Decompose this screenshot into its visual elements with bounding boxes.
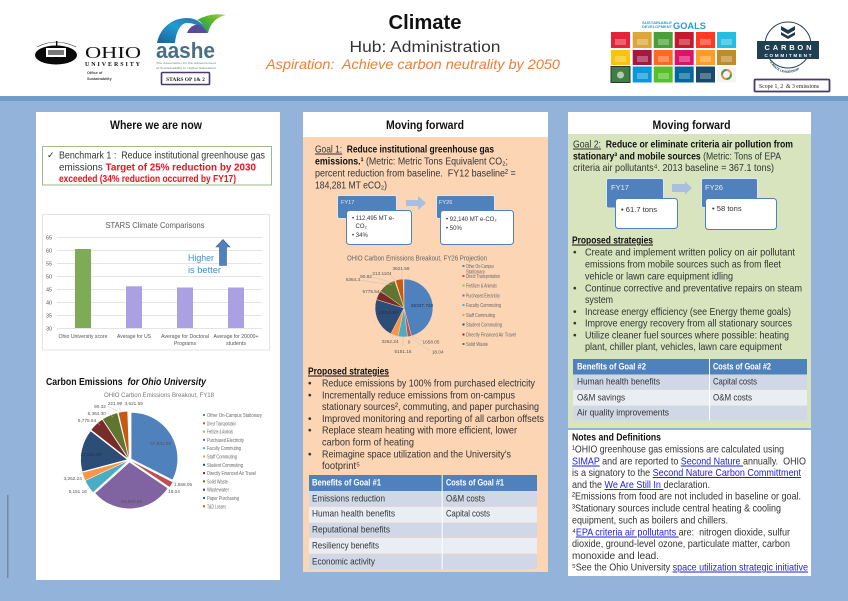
pie chart: FY26 projection: 12016.90: [378, 310, 398, 315]
proposed strategies goal 1: footprint⁵: [322, 461, 360, 472]
flow: FY17 to FY26 emissions: [338, 196, 514, 244]
benchmark callout: exceeded (34% reduction occurred by FY17): [59, 174, 236, 185]
pie chart: FY26 projection: 213.1104: [372, 271, 392, 276]
logo: AASHE: aashe: [156, 38, 215, 63]
pie chart: FY26 projection: 5775.54: [363, 289, 380, 294]
table: benefits and costs of goal 1: Benefits of Goal #1: [312, 478, 381, 488]
pie chart: FY18 emissions: OHIO Carbon Emissions Breakout, FY18: [104, 392, 214, 399]
proposed strategies goal 2: •: [573, 284, 577, 294]
table: benefits and costs of goal 2: Air quality improvements: [577, 408, 669, 418]
table: benefits and costs of goal 2: [573, 359, 807, 420]
pie legend: Direct Transportation: [207, 421, 236, 427]
flow: FY17 to FY26 emissions: FY17: [341, 200, 354, 206]
benchmark callout: ✓: [47, 150, 55, 160]
proposed strategies goal 1: Proposed strategies: [308, 366, 389, 378]
proposed strategies goal 2: plant, chiller plant, vehicles, lawn care equipment: [585, 342, 782, 353]
pie chart: FY18 emissions: 1,658.05: [174, 482, 193, 487]
table: benefits and costs of goal 2: Capital costs: [713, 376, 757, 386]
table: benefits and costs of goal 1: O&M costs: [446, 494, 485, 504]
heading: moving forward: Moving forward: [386, 120, 464, 132]
proposed strategies goal 2: •: [573, 318, 577, 330]
pie chart: FY26 projection: 1658.05: [423, 340, 440, 344]
flow: FY17 to FY26 tons: [606, 178, 776, 230]
notes text: equipment, such as boilers and chillers.: [572, 516, 728, 526]
table: benefits and costs of goal 2: O&M costs: [713, 392, 752, 402]
proposed strategies goal 1: •: [308, 390, 312, 402]
goal 1 statement: Goal 1: Reduce institutional greenhouse gas: [315, 144, 494, 156]
proposed strategies goal 2: emissions from mobile sources such as from fleet: [585, 260, 781, 270]
title: Climate: [388, 12, 462, 34]
logo: AASHE: [156, 14, 226, 84]
proposed strategies goal 1: [308, 366, 544, 472]
flow: FY17 to FY26 tons: FY26: [705, 183, 723, 192]
pie chart: FY18 emissions: 3,621.59: [125, 401, 143, 406]
bar chart: STARS climate comparisons: 60: [46, 248, 52, 254]
logo: Ohio University: Sustainability: [87, 77, 113, 81]
proposed strategies goal 1: Reimagine space utilization and the University's: [322, 450, 511, 460]
bar chart: STARS climate comparisons: Average for US: [117, 334, 151, 340]
bar chart: STARS climate comparisons: Ohio University score: [58, 334, 108, 340]
proposed strategies goal 2: Continue corrective and preventative repairs on steam: [585, 284, 802, 294]
logo: Carbon Commitment: CARBON: [764, 43, 812, 52]
logo: Ohio University: Office of: [87, 71, 103, 75]
flow: FY17 to FY26 emissions: • 50%: [446, 226, 462, 232]
pie chart: FY26 projection: [346, 256, 516, 354]
pie chart: FY18 emissions: 3,262.24: [64, 476, 82, 481]
hub subtitle: Hub: Administration: [350, 39, 500, 56]
callout: higher is better: Higher: [188, 253, 214, 263]
proposed strategies goal 2: vehicle or lawn care equipment idling: [585, 272, 733, 282]
pie chart: FY26 projection: 3262.24: [382, 339, 399, 344]
pie chart: FY18 emissions: 6,364.30: [88, 411, 106, 416]
panel: notes and definitions: [568, 430, 811, 576]
title: [265, 12, 560, 72]
STARS callout box: STARS OP 1& 2: [166, 77, 205, 83]
pie legend: Solid Waste: [466, 342, 488, 348]
pie chart: FY26 projection: 26337.728: [411, 303, 433, 308]
benchmark callout: emissions Target of 25% reduction by 2030: [59, 162, 256, 174]
pie chart: FY18 emissions: [64, 392, 262, 510]
pie legend: [462, 264, 516, 348]
bar chart: STARS climate comparisons: 40: [46, 300, 52, 306]
proposed strategies goal 2: •: [573, 330, 577, 342]
table: benefits and costs of goal 2: Benefits of Goal #2: [577, 362, 646, 372]
proposed strategies goal 1: stationary sources², commuting, and paper purchasing: [322, 402, 539, 413]
pie legend: [203, 413, 262, 510]
notes text: ²Emissions from food are not included in baseline or goal.: [572, 492, 801, 502]
proposed strategies goal 2: Proposed strategies: [572, 236, 653, 246]
pie legend: Faculty Commuting: [207, 446, 241, 452]
pie legend: Purchased Electricity: [207, 438, 244, 444]
logo: Carbon Commitment: CLIMATE LEADERSHIP: [770, 60, 799, 73]
notes text: SIMAP and are reported to Second Nature annually. OHIO: [572, 456, 806, 468]
notes text: ⁴EPA criteria air pollutants are: nitrogen dioxide, sulfur: [572, 528, 791, 538]
arrow: higher is better: [216, 240, 230, 266]
pie legend: Staff Commuting: [207, 454, 237, 460]
pie legend: Directly Financed Air Travel: [466, 332, 516, 338]
vertical small print: [7, 495, 8, 578]
bar chart: STARS climate comparisons: Average for Doctoral: [161, 334, 209, 340]
notes text: and the We Are Still In declaration.: [572, 480, 710, 491]
proposed strategies goal 2: Improve energy recovery from all stationary sources: [585, 318, 792, 330]
flow: FY17 to FY26 emissions: • 92,140 MT e-CO₂: [446, 217, 497, 223]
logo: Sustainable Development Goals: GOALS: [673, 21, 706, 31]
heading: moving forward: Moving forward: [652, 120, 730, 132]
bar chart: STARS climate comparisons: 35: [46, 314, 52, 320]
pie legend: Stationary: [466, 270, 485, 276]
pie chart: FY26 projection: 5151.16: [395, 349, 412, 354]
logo: Ohio University: UNIVERSITY: [85, 62, 141, 68]
table: benefits and costs of goal 2: O&M savings: [577, 392, 625, 402]
pie chart: FY26 projection: 90.82: [360, 274, 372, 279]
flow: FY17 to FY26 emissions: • 112,495 MT e-: [352, 216, 394, 222]
bar chart: STARS climate comparisons: students: [226, 341, 246, 347]
pie legend: Student Commuting: [466, 322, 502, 328]
pie legend: Directly Financed Air Travel: [207, 471, 256, 477]
pie chart: FY18 emissions: 54,823.66: [121, 499, 143, 504]
proposed strategies goal 1: Reduce emissions by 100% from purchased electricity: [322, 378, 536, 390]
table: benefits and costs of goal 1: Capital costs: [446, 508, 490, 518]
proposed strategies goal 1: Replace steam heating with more efficient, lower: [322, 426, 518, 436]
logo: Sustainable Development Goals: SUSTAINABLE: [642, 21, 673, 25]
goal 2 statement: Goal 2: Reduce or eliminate criteria air pollution from: [573, 140, 793, 150]
proposed strategies goal 2: Create and implement written policy on air pollutant: [585, 248, 795, 258]
callout: higher is better: [188, 253, 221, 275]
bar chart: STARS climate comparisons: 50: [46, 274, 52, 280]
logo: Sustainable Development Goals: [611, 21, 736, 82]
proposed strategies goal 2: system: [585, 295, 613, 306]
panel: where we are now: [36, 112, 280, 580]
proposed strategies goal 1: Incrementally reduce emissions from on-campus: [322, 390, 515, 402]
pie legend: Wastewater: [207, 488, 229, 494]
arrow: FY17 to FY26: [406, 196, 426, 210]
notes text: ¹OHIO greenhouse gas emissions are calculated using: [572, 444, 784, 456]
notes text: [572, 444, 808, 574]
pie legend: Student Commuting: [207, 463, 243, 469]
bar chart: STARS climate comparisons: 30: [46, 326, 52, 332]
bar chart: STARS climate comparisons: 55: [46, 262, 52, 268]
pie legend: Solid Waste: [207, 479, 228, 485]
notes text: monoxide and lead.: [572, 551, 659, 562]
benchmark callout: [42, 146, 272, 185]
pie legend: T&D Losses: [207, 504, 226, 510]
bar chart: STARS climate comparisons: 45: [46, 288, 52, 294]
bar chart: STARS climate comparisons: STARS Climate Comparisons: [106, 221, 204, 230]
goal 2 statement: [573, 140, 793, 174]
table: benefits and costs of goal 1: Reputational benefits: [312, 524, 390, 534]
pie chart: FY18 emissions: 57,831.80: [150, 441, 172, 446]
arrow: FY17 to FY26: [672, 182, 692, 194]
pie legend: Purchased Electricity: [466, 294, 500, 300]
notes text: ³Stationary sources include central heating & cooling: [572, 504, 781, 514]
table: benefits and costs of goal 1: Resiliency benefits: [312, 540, 379, 550]
proposed strategies goal 1: Improved monitoring and reporting of all carbon offsets: [322, 414, 544, 425]
panel: moving forward goal 2: [568, 112, 811, 428]
table: benefits and costs of goal 1: Human health benefits: [312, 508, 395, 518]
table: benefits and costs of goal 1: [309, 475, 537, 569]
logo: AASHE: of Sustainability in Higher Education: [156, 66, 216, 70]
heading: carbon emissions: Carbon Emissions for Ohio University: [46, 377, 207, 388]
pie chart: FY26 projection: 0: [408, 340, 411, 344]
aspiration line: Aspiration: Achieve carbon neutrality by 2050: [265, 56, 560, 72]
goal 1 statement: emissions.¹ (Metric: Metric Tons Equivalent CO₂;: [315, 156, 508, 168]
pie legend: Fertilizer & Animals: [207, 430, 233, 436]
logo: Ohio University: [35, 41, 141, 81]
proposed strategies goal 2: Utilize cleaner fuel sources where possible: heating: [585, 330, 789, 342]
flow: FY17 to FY26 tons: • 58 tons: [712, 204, 742, 213]
proposed strategies goal 2: •: [573, 248, 577, 258]
pie legend: Other On-Campus: [466, 264, 494, 270]
table: benefits and costs of goal 1: Economic activity: [312, 556, 375, 566]
pie chart: FY18 emissions: 5,151.16: [69, 489, 87, 494]
proposed strategies goal 1: •: [308, 450, 312, 460]
goal 1 statement: 184,281 MT eCO₂): [315, 180, 387, 192]
heading: where we are now: Where we are now: [110, 120, 202, 132]
bar chart: STARS climate comparisons: 65: [46, 236, 52, 242]
benchmark callout: Benchmark 1 : Reduce institutional greenhouse gas: [59, 150, 265, 162]
pie chart: FY26 projection: 6364.3: [346, 277, 361, 282]
proposed strategies goal 2: [572, 236, 802, 353]
notes text: ⁵See the Ohio University space utilization strategic initiative: [572, 562, 808, 574]
callout: higher is better: is better: [188, 265, 221, 275]
pie chart: FY18 emissions: 90.32: [94, 404, 106, 409]
flow: FY17 to FY26 emissions: • 34%: [352, 233, 368, 239]
pie chart: FY18 emissions: 18.04: [168, 489, 180, 494]
pie legend: Fertilizer & Animals: [466, 284, 497, 290]
pie chart: FY26 projection: OHIO Carbon Emissions Breakout, FY26 Projection: [347, 256, 487, 262]
logo: AASHE: The Association for the Advancement: [156, 61, 216, 65]
goal 1 statement: percent reduction from baseline. FY12 baseline² =: [315, 168, 516, 180]
pie legend: Other On-Campus Stationary: [207, 413, 262, 419]
pie legend: Paper Purchasing: [207, 496, 239, 502]
goal 2 statement: stationary³ and mobile sources (Metric: Tons of EPA: [573, 152, 781, 162]
logo: Sustainable Development Goals: DEVELOPMENT: [642, 25, 673, 29]
pie chart: FY18 emissions: 27,032.89: [81, 452, 102, 457]
bar chart: STARS climate comparisons: Average for 20000+: [214, 334, 258, 340]
bar chart: STARS climate comparisons: [42, 214, 270, 350]
pie legend: Staff Commuting: [466, 313, 495, 319]
proposed strategies goal 1: carbon form of heating: [322, 438, 414, 448]
logo: Carbon Commitment: COMMITMENT: [764, 53, 812, 58]
goal 2 statement: criteria air pollutants⁴. 2013 baseline = 367.1 tons): [573, 163, 774, 174]
proposed strategies goal 1: •: [308, 426, 312, 436]
table: benefits and costs of goal 1: Emissions reduction: [312, 494, 385, 504]
table: benefits and costs of goal 2: Human health benefits: [577, 376, 660, 386]
proposed strategies goal 1: •: [308, 414, 312, 425]
bar chart: STARS climate comparisons: Programs: [174, 341, 196, 347]
notes heading: Notes and Definitions: [572, 432, 661, 444]
pie chart: FY18 emissions: 221.99: [108, 401, 123, 406]
goal 1 statement: [315, 144, 516, 192]
notes text: dioxide, ground-level ozone, particulate matter, carbon: [572, 539, 790, 550]
pie chart: FY26 projection: 18.04: [432, 350, 444, 354]
logo: Carbon Commitment: [754, 22, 830, 92]
table: benefits and costs of goal 2: Costs of Goal #2: [713, 362, 771, 372]
proposed strategies goal 1: •: [308, 378, 312, 390]
notes text: is a signatory to the Second Nature Carbon Committment: [572, 468, 801, 479]
proposed strategies goal 2: •: [573, 307, 577, 318]
flow: FY17 to FY26 tons: • 61.7 tons: [621, 205, 657, 214]
pie chart: FY26 projection: 3621.59: [393, 266, 410, 271]
table: benefits and costs of goal 1: Costs of Goal #1: [446, 478, 504, 488]
pie legend: Faculty Commuting: [466, 303, 501, 309]
proposed strategies goal 2: Increase energy efficiency (see Energy theme goals): [585, 307, 791, 318]
scope callout box: Scope 1, 2 & 3 emissions: [759, 84, 820, 90]
flow: FY17 to FY26 emissions: FY26: [439, 200, 452, 206]
flow: FY17 to FY26 tons: FY17: [611, 183, 629, 192]
flow: FY17 to FY26 emissions: CO₂: [356, 224, 368, 230]
panel: moving forward goal 1: [303, 112, 548, 572]
logo: Ohio University: OHIO: [85, 43, 141, 62]
pie chart: FY18 emissions: 5,775.54: [78, 418, 97, 423]
pie legend: Direct Transportation: [466, 274, 500, 280]
